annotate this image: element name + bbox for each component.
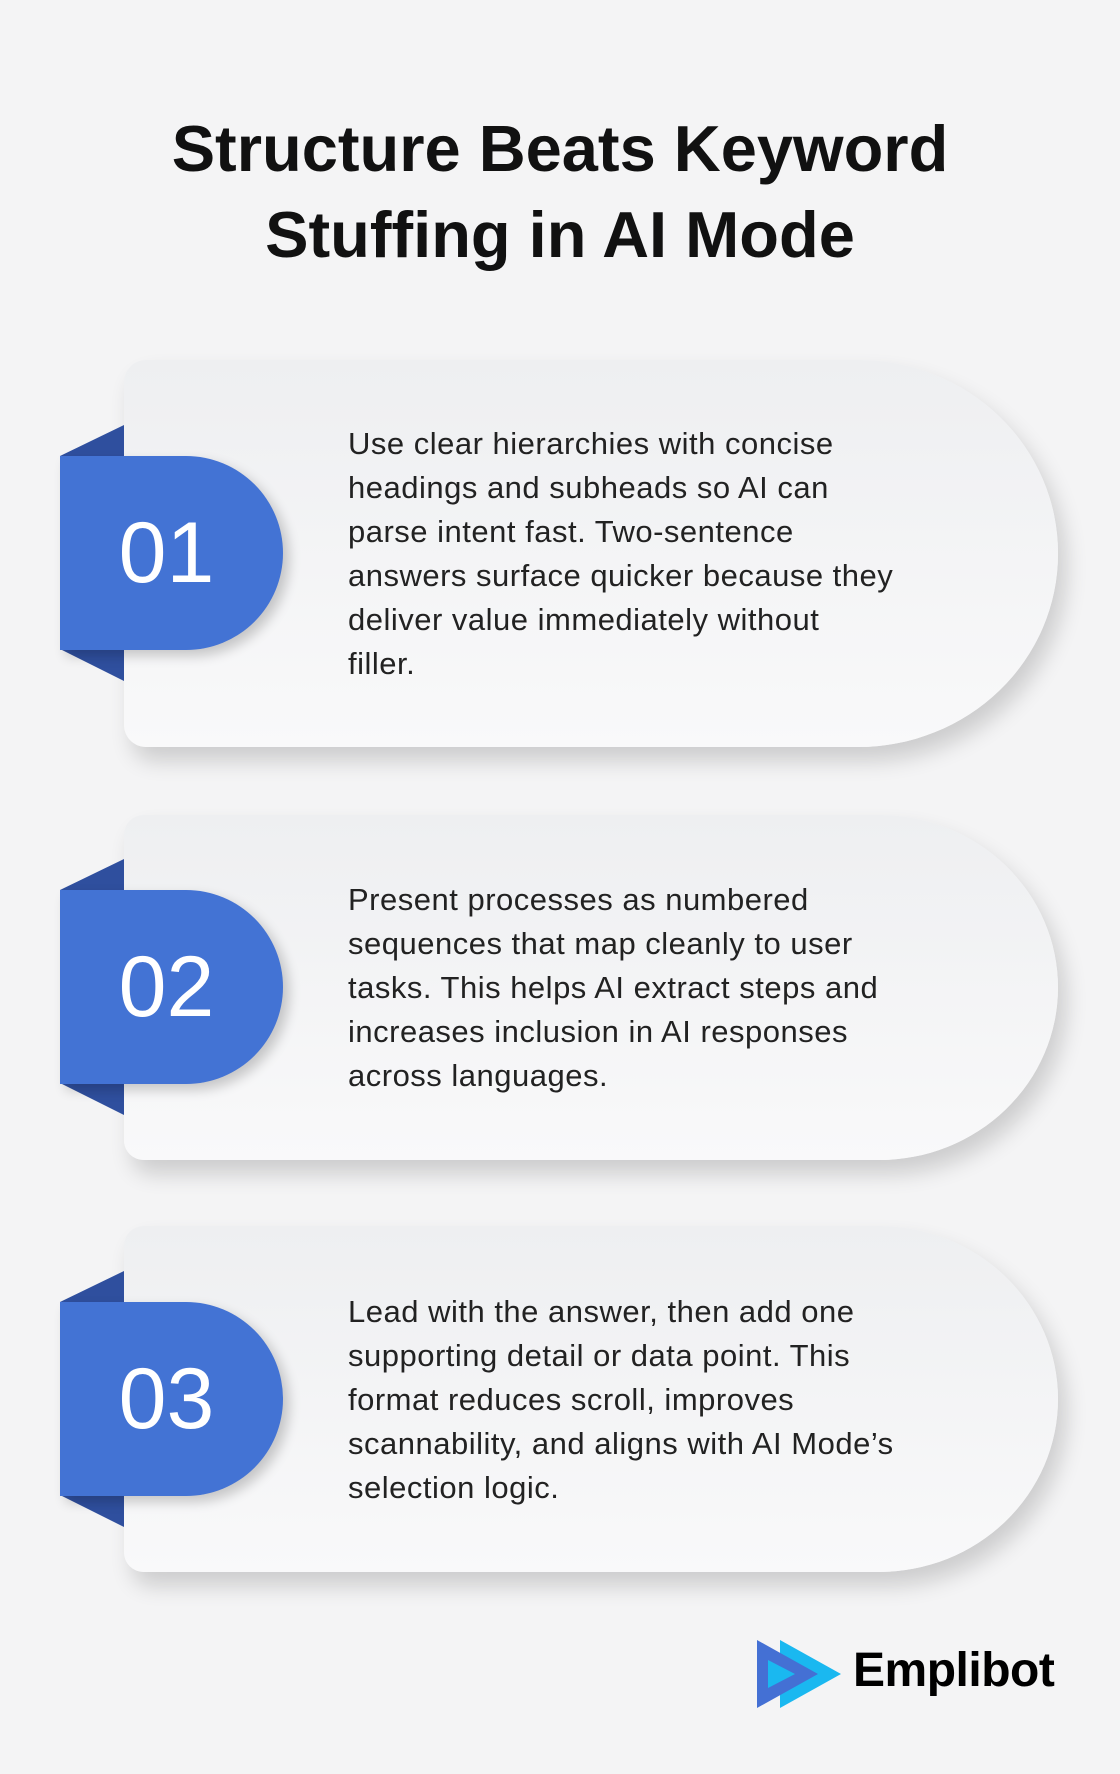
- badge 01: 01: [119, 505, 214, 601]
- text 1: [348, 426, 893, 681]
- text 3: Lead with the answer, then add one: [348, 1294, 854, 1329]
- text 3: supporting detail or data point. This: [348, 1338, 850, 1373]
- text 3: [348, 1294, 894, 1505]
- card 3: [124, 1226, 1058, 1572]
- text 1: filler.: [348, 646, 415, 681]
- text 1: answers surface quicker because they: [348, 558, 893, 593]
- text 2: Present processes as numbered: [348, 882, 809, 917]
- text 2: tasks. This helps AI extract steps and: [348, 970, 878, 1005]
- panel: step 1: [60, 395, 1074, 770]
- badge 02: [60, 890, 283, 1084]
- title: Structure Beats Keyword: [172, 112, 948, 185]
- text 1: headings and subheads so AI can: [348, 470, 829, 505]
- logo text: Emplibot: [853, 1644, 1054, 1697]
- text 2: [348, 882, 878, 1093]
- card 1: [124, 360, 1058, 747]
- title: Stuffing in AI Mode: [265, 198, 855, 271]
- fold 3: [60, 1271, 124, 1527]
- panel: step 2: [60, 847, 1074, 1182]
- title: [172, 112, 948, 271]
- card 2: [124, 815, 1058, 1160]
- text 1: Use clear hierarchies with concise: [348, 426, 834, 461]
- badge 03: 03: [119, 1351, 214, 1447]
- icon: play triangles: [757, 1640, 841, 1708]
- badge 03: [60, 1302, 283, 1496]
- text 3: format reduces scroll, improves: [348, 1382, 794, 1417]
- text 2: increases inclusion in AI responses: [348, 1014, 848, 1049]
- badge 01: [60, 456, 283, 650]
- text 3: scannability, and aligns with AI Mode’s: [348, 1426, 894, 1461]
- text 2: across languages.: [348, 1058, 608, 1093]
- fold 2: [60, 859, 124, 1115]
- panel: step 3: [60, 1258, 1074, 1594]
- text 2: sequences that map cleanly to user: [348, 926, 853, 961]
- logo: [757, 1640, 1054, 1708]
- text 3: selection logic.: [348, 1470, 559, 1505]
- text 1: parse intent fast. Two-sentence: [348, 514, 794, 549]
- text 1: deliver value immediately without: [348, 602, 819, 637]
- fold 1: [60, 425, 124, 681]
- badge 02: 02: [119, 939, 214, 1035]
